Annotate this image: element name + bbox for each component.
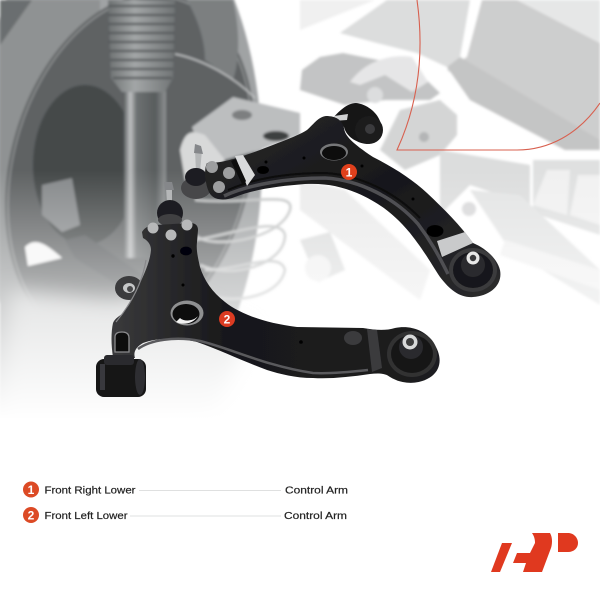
- legend row 1: Front Right Lower: [44, 484, 136, 496]
- light band 1: [437, 232, 473, 257]
- legend row 2: Control Arm: [284, 510, 347, 522]
- control arm 1: front right: [181, 103, 500, 297]
- legend row 1: 1: [28, 483, 35, 497]
- slot bracket 2: [115, 332, 129, 352]
- vertical band 2: [367, 329, 382, 372]
- control arm 2: front left: [96, 182, 440, 397]
- badge 2: 2: [224, 312, 231, 326]
- shock boot: [108, 0, 175, 92]
- badge 2: [219, 311, 235, 327]
- ball joint 2: [157, 182, 183, 226]
- subframe panels: [340, 0, 470, 67]
- inner bushing 2: [96, 355, 146, 397]
- soft lower wheel wash: [0, 290, 250, 430]
- lip highlight 2: [138, 339, 368, 373]
- bushing 1: [333, 103, 383, 144]
- legend row 2: [23, 507, 347, 523]
- holes 1: [257, 144, 444, 237]
- legend row 2: 2: [28, 508, 35, 522]
- legend row 1: Control Arm: [285, 484, 348, 496]
- lip highlight 1: [224, 178, 448, 274]
- strut tube: [124, 88, 166, 258]
- lower bushing (background): [300, 232, 345, 282]
- legend row 2: Front Left Lower: [44, 510, 128, 522]
- silver band 1: [235, 155, 255, 186]
- upper subframe bracket: [192, 97, 300, 165]
- coil spring: [195, 199, 290, 299]
- rivets 1: [206, 161, 235, 193]
- red arc line: [397, 0, 600, 150]
- legend: [23, 482, 348, 523]
- bottom white fade: [0, 170, 600, 420]
- arm body 2: [112, 223, 440, 383]
- ball joint 1: [181, 144, 211, 199]
- rivets 2: [148, 220, 192, 240]
- wheel and tyre: [0, 0, 292, 430]
- arm body 1: [205, 116, 500, 297]
- badge 1: [341, 164, 357, 180]
- mount tab 2: [115, 276, 143, 300]
- holes 2: [170, 246, 362, 345]
- white base below fade: [0, 418, 600, 600]
- legend row 1: [23, 482, 348, 498]
- logo: [491, 533, 578, 572]
- end bushing 2: [387, 331, 437, 377]
- badge 1: 1: [346, 166, 353, 180]
- end bushing 1: [449, 248, 497, 292]
